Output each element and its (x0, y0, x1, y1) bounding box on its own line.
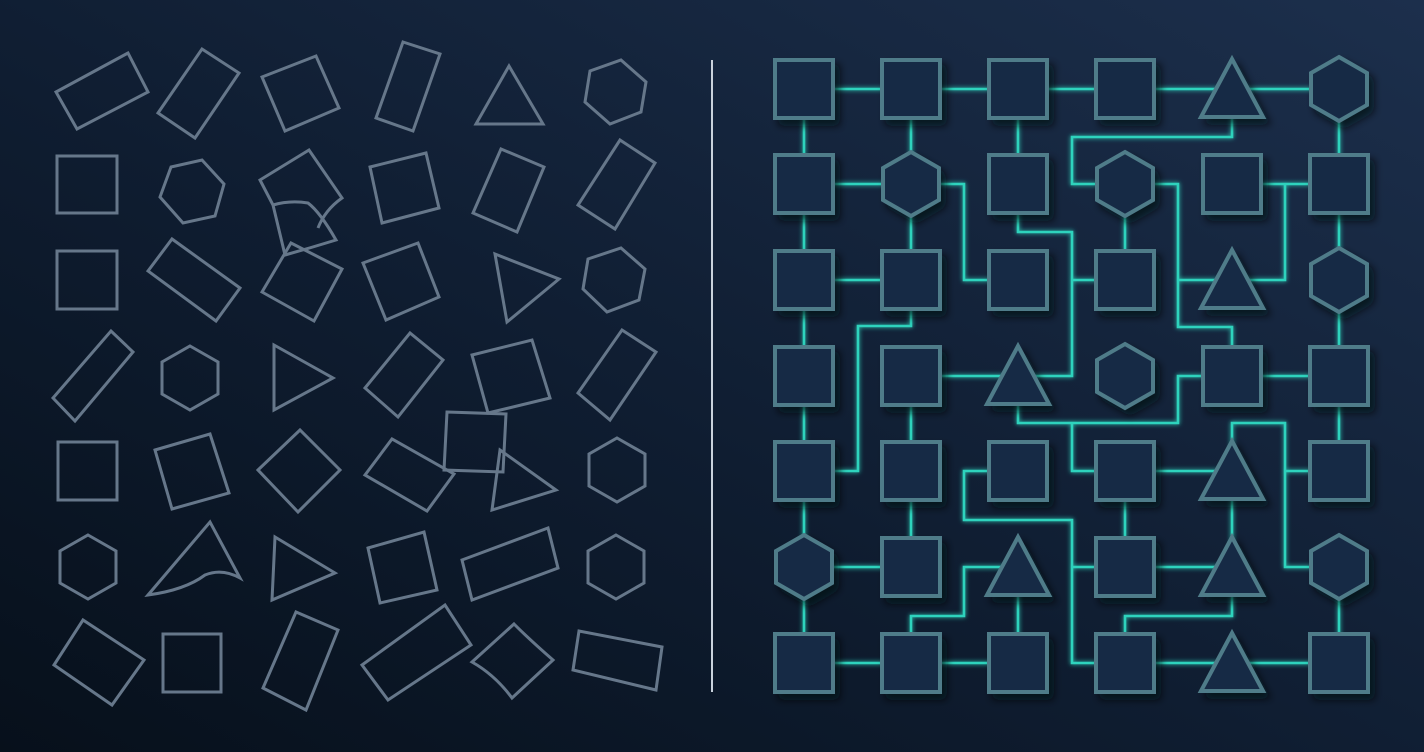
panel: connected network (775, 57, 1368, 692)
panel: chaotic shapes (53, 42, 662, 710)
network nodes (775, 57, 1368, 692)
divider (711, 60, 713, 692)
connector lines (804, 89, 1339, 663)
